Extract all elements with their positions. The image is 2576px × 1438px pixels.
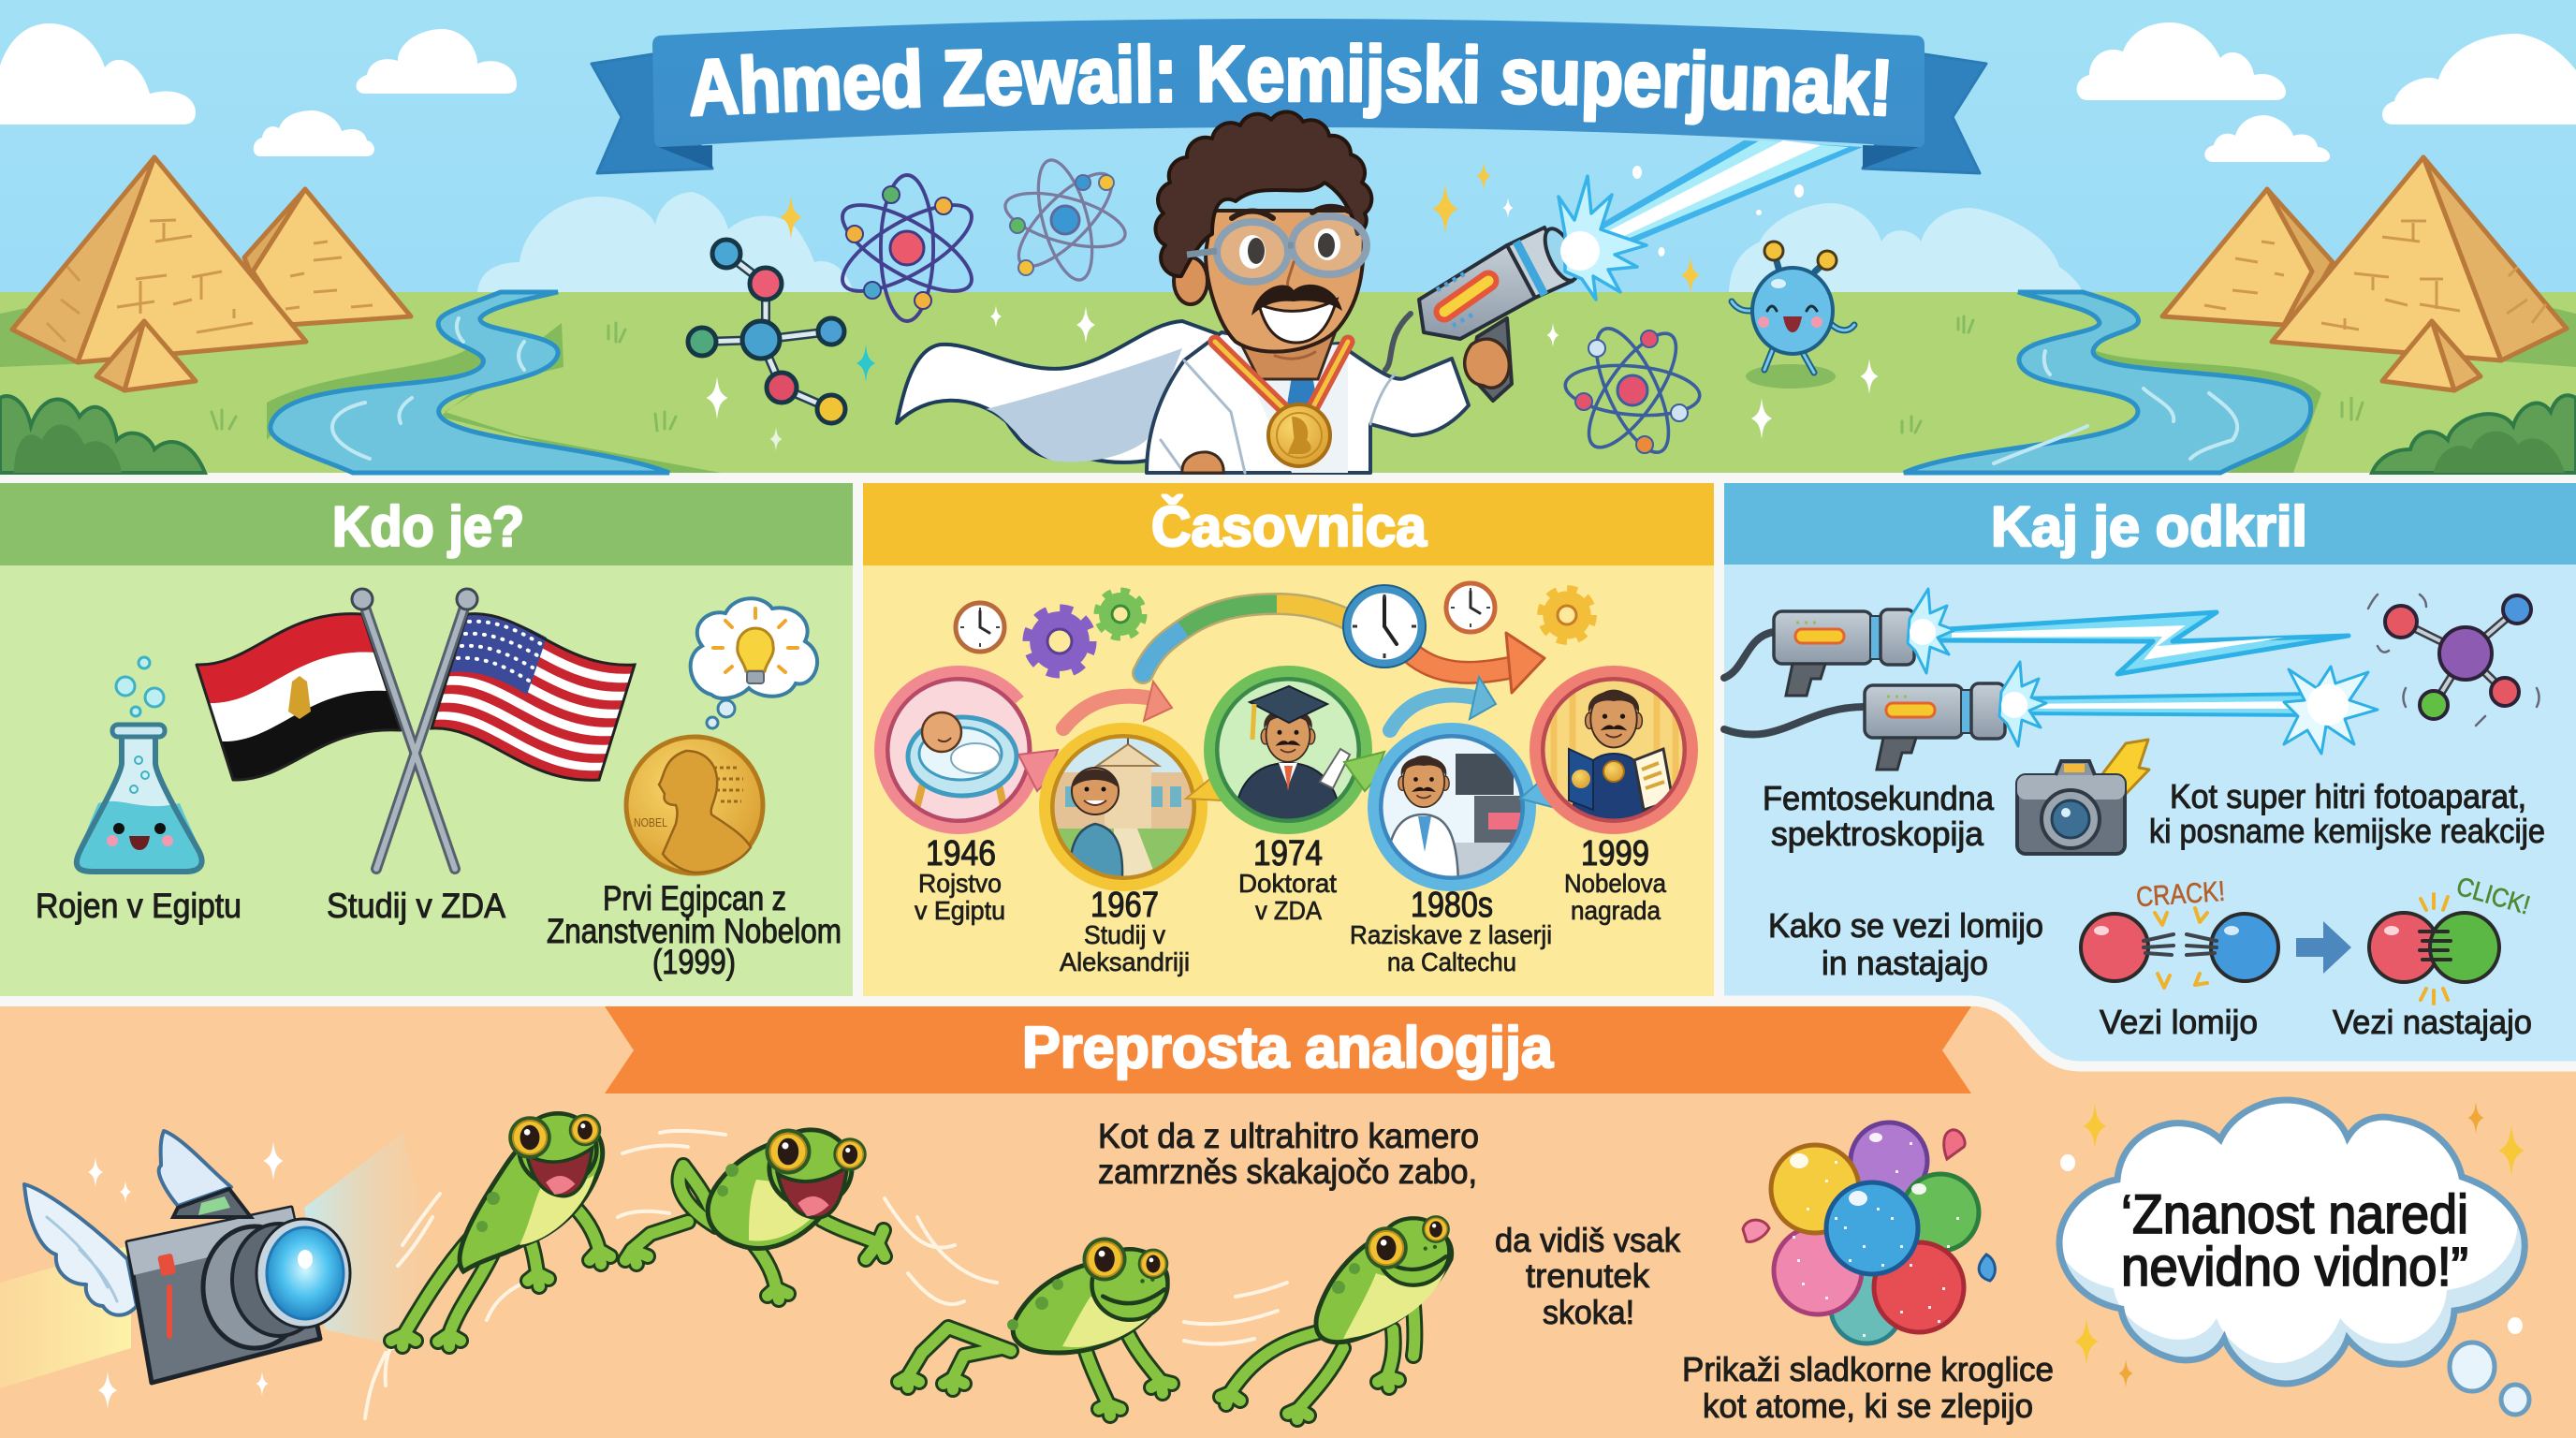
text: ultrahitra kamera: zamrzněs skakajočo zabo, <box>1098 1152 1477 1191</box>
text: vsak trenutek: trenutek <box>1526 1256 1650 1295</box>
white clouds <box>0 22 2576 162</box>
label: Rojen v Egiptu: Rojen v Egiptu <box>36 887 242 925</box>
wing <box>24 1184 137 1315</box>
camera speed trail <box>0 1245 131 1388</box>
frog 3 <box>899 1237 1172 1416</box>
label: 1967: Aleksandriji <box>1060 947 1190 976</box>
text: sladkorne kroglice: kot atome, ki se zlepijo <box>1703 1387 2033 1425</box>
sparkles camera <box>88 1141 283 1409</box>
lab coat <box>1147 332 1469 473</box>
moustache and smile <box>1251 285 1342 359</box>
blue molecule mascot <box>1732 242 1854 389</box>
laser gun 1 <box>1774 609 1914 696</box>
label: fotoaparat: ki posname kemijske reakcije <box>2149 812 2545 850</box>
bond forming balls <box>2369 894 2499 1004</box>
icon: camera with bolt <box>2017 740 2149 854</box>
label: Prvi Egipcan: (1999) <box>652 943 736 981</box>
panel: Preprosta analogija <box>0 1006 2529 1425</box>
wing <box>159 1131 231 1206</box>
laser wires <box>1724 632 1865 735</box>
arrow: blue <box>1390 677 1496 730</box>
panel: Kdo je? <box>0 483 853 996</box>
label: 1974: Doktorat <box>1238 869 1337 898</box>
gears <box>1030 591 1591 671</box>
laser gun wire and body <box>1385 224 1584 401</box>
quote text: ‘Znanost naredi <box>2121 1184 2468 1245</box>
label: CLICK: CLICK! <box>2453 872 2533 920</box>
label: Vezi nastajajo: Vezi nastajajo <box>2333 1003 2532 1041</box>
text: ultrahitra kamera: Kot da z ultrahitro kamero <box>1098 1117 1479 1155</box>
muzzle flash <box>1559 176 1647 300</box>
label: CRACK: CRACK! <box>2135 876 2226 913</box>
quote cloud: nevidno vidno!” <box>2121 1237 2468 1298</box>
arrow: bonds <box>2296 921 2351 974</box>
label: 1999: 1999 <box>1581 834 1649 873</box>
laser gun 2 <box>1865 683 2005 770</box>
laser beam zigzag <box>1933 612 2349 674</box>
icon: flask <box>77 657 202 872</box>
hearts and drop <box>1743 1130 1995 1281</box>
hair <box>1155 111 1371 276</box>
bushes <box>0 395 2576 473</box>
sparkles quote <box>2060 1102 2524 1387</box>
sparkles hero <box>706 162 1878 451</box>
timeline: 1999 nobel <box>1535 671 1694 833</box>
panel header <box>1724 483 2576 565</box>
frog 4 <box>1221 1215 1452 1419</box>
grass tufts <box>212 316 2363 433</box>
label: 1974: v ZDA <box>1255 896 1322 925</box>
pyramids left <box>0 157 411 390</box>
label: Femtosekundna spektroskopija: spektroskopija <box>1771 814 1984 853</box>
text: ultrahitra kamera <box>1098 1117 1479 1191</box>
label: 1999: Nobelova <box>1564 869 1666 898</box>
bond breaking balls <box>2081 908 2278 988</box>
thought bubbles <box>2450 1343 2529 1415</box>
label: bonds: Kako se vezi lomijo <box>1768 906 2043 945</box>
label: 1980s: na Caltechu <box>1387 947 1516 976</box>
camera lens <box>203 1226 306 1348</box>
ribbon <box>605 1006 1971 1093</box>
hand at coat <box>1182 452 1223 473</box>
label: Femtosekundna spektroskopija <box>1763 779 1995 853</box>
rivers <box>267 292 2321 473</box>
arrow head orange <box>1506 633 1544 693</box>
text: sladkorne kroglice <box>1682 1350 2054 1425</box>
flash 2 <box>1999 662 2046 746</box>
atom icons <box>830 143 1705 466</box>
label: 1980s <box>1350 886 1552 976</box>
laser beam straight with burst <box>2012 667 2378 754</box>
icon: thought bubble with lightbulb <box>691 598 817 728</box>
molecule left <box>688 240 845 423</box>
decorative clocks <box>956 583 1495 652</box>
label: 1999 <box>1564 834 1666 925</box>
label: 1980s: Raziskave z laserji <box>1350 920 1552 949</box>
molecule <box>2368 594 2539 726</box>
glasses and eyes <box>1187 207 1367 288</box>
USA flag <box>431 614 635 780</box>
heading: Preprosta analogija <box>1022 1016 1553 1080</box>
label: 1980s: 1980s <box>1411 886 1493 925</box>
icon: nobel medal: NOBEL <box>634 815 667 829</box>
camera light beam <box>304 1133 460 1360</box>
label: 1967: 1967 <box>1090 886 1159 925</box>
sugar balls <box>1771 1123 1979 1343</box>
gold medal <box>1268 404 1330 466</box>
quote cloud <box>2052 1079 2525 1384</box>
text: sladkorne kroglice: Prikaži sladkorne kroglice <box>1682 1350 2054 1388</box>
title banner <box>590 19 1988 174</box>
frog 1 <box>391 1113 610 1346</box>
label: 1946: 1946 <box>926 834 996 873</box>
label: 1999: nagrada <box>1571 896 1661 925</box>
label: Prvi Egipcan: Prvi Egipcan z <box>603 879 786 917</box>
flying camera <box>24 1131 350 1383</box>
label: Femtosekundna spektroskopija: Femtosekundna <box>1763 779 1995 817</box>
heading: Kdo je? <box>332 495 524 558</box>
label: fotoaparat: Kot super hitri fotoaparat, <box>2170 777 2526 815</box>
flag poles <box>352 589 477 869</box>
cape <box>897 321 1226 462</box>
panel header <box>863 483 1714 565</box>
motion lines <box>365 1131 1287 1418</box>
frog 2 <box>625 1129 885 1299</box>
laser beam <box>1599 140 1863 251</box>
Egypt flag <box>197 614 401 780</box>
label: 1967: Studij v <box>1084 920 1165 949</box>
label: 1946: Rojstvo <box>918 869 1002 898</box>
label: Prvi Egipcan <box>547 879 842 981</box>
text: vsak trenutek: skoka! <box>1543 1293 1634 1331</box>
label: Prvi Egipcan: Znanstvenim Nobelom <box>547 912 842 950</box>
label: 1974 <box>1238 834 1337 925</box>
hero scene: sky and meadow background <box>0 0 2576 473</box>
panel: Kaj je odkril <box>1724 483 2576 1066</box>
label: 1946 <box>915 834 1005 925</box>
flash 1 <box>1908 589 1954 673</box>
ear <box>1174 257 1208 304</box>
camera body <box>127 1208 320 1383</box>
icon: nobel medal <box>626 737 763 873</box>
panel header <box>0 483 853 565</box>
label: bonds <box>1768 906 2043 982</box>
panel body <box>1724 565 2576 1062</box>
neck <box>1228 318 1340 379</box>
heading: Časovnica <box>1151 495 1427 558</box>
label: Studij v ZDA: Studij v ZDA <box>327 887 505 925</box>
timeline: 1967 study <box>1039 728 1222 889</box>
panel body <box>863 565 1714 996</box>
panel white edge <box>1724 1001 2576 1066</box>
timeline: 1974 doctorate <box>1208 671 1384 833</box>
character: Ahmed Zewail superhero <box>897 111 1647 473</box>
panel body <box>0 565 853 996</box>
hand on gun <box>1465 339 1509 388</box>
label: Vezi lomijo: Vezi lomijo <box>2100 1003 2258 1041</box>
timeline: 1980s research <box>1373 728 1552 889</box>
arrow: long timeline arc <box>1143 604 1516 673</box>
label: 1967 <box>1060 886 1190 976</box>
panel: Časovnica <box>863 483 1714 996</box>
icon: crossed flags <box>197 589 635 869</box>
label: bonds: in nastajajo <box>1822 944 1988 982</box>
medal ribbon <box>1215 342 1348 412</box>
big clock <box>1343 585 1426 668</box>
heading: Kaj je odkril <box>1991 495 2307 558</box>
timeline: 1946 birth <box>880 671 1058 833</box>
pyramids right <box>2162 157 2576 390</box>
label: 1946: v Egiptu <box>915 896 1005 925</box>
text: vsak trenutek: da vidiš vsak <box>1495 1221 1681 1259</box>
label: 1974: 1974 <box>1253 834 1323 873</box>
arrow: pink <box>1063 682 1172 728</box>
face <box>1206 211 1364 352</box>
title: Ahmed Zewail: Kemijski superjunak! <box>690 42 1889 125</box>
label: fotoaparat <box>2149 777 2545 850</box>
panel: Preprosta analogija background <box>0 1006 2576 1438</box>
text: vsak trenutek <box>1495 1221 1681 1331</box>
